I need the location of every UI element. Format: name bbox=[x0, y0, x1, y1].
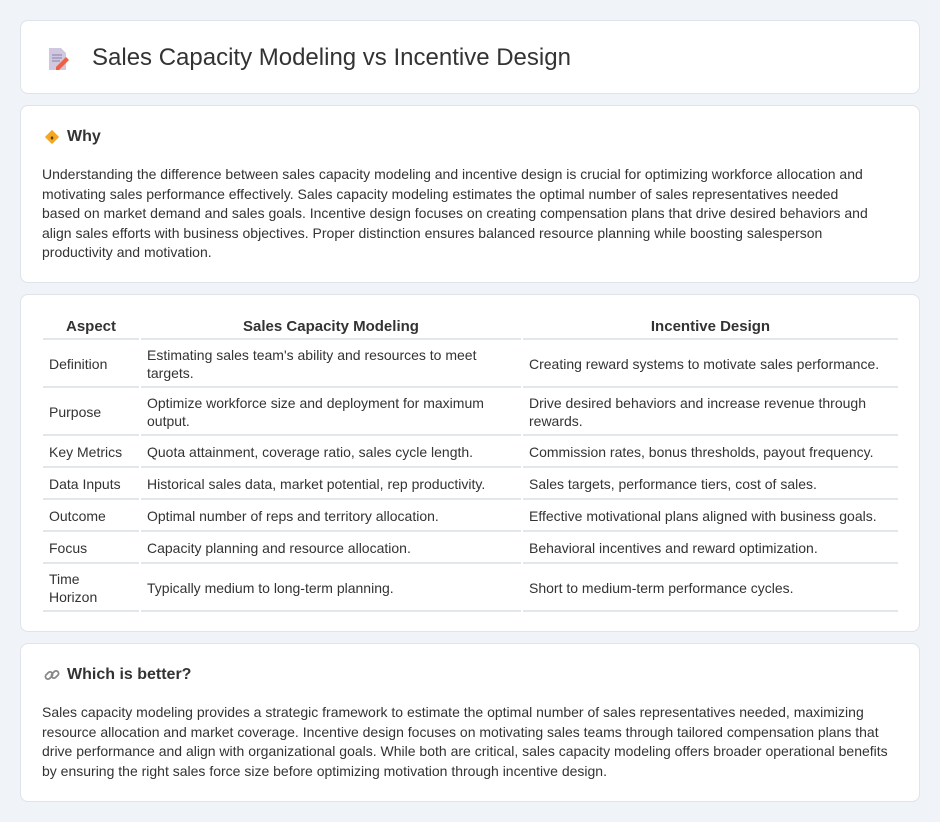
table: Commission rates, bonus thresholds, payout frequency. bbox=[529, 444, 873, 460]
table: Short to medium-term performance cycles. bbox=[529, 580, 794, 596]
icon: document with pencil bbox=[49, 48, 69, 70]
table: Aspect bbox=[66, 318, 116, 335]
table: Focus bbox=[49, 540, 87, 556]
heading: Why bbox=[67, 128, 101, 145]
table: Sales Capacity Modeling bbox=[243, 318, 419, 335]
panel: which is better bbox=[20, 643, 920, 802]
table: Time bbox=[49, 571, 80, 587]
table: Definition bbox=[49, 356, 107, 372]
table: Purpose bbox=[49, 404, 101, 420]
table: Data Inputs bbox=[49, 476, 121, 492]
table: Sales targets, performance tiers, cost of sales. bbox=[529, 476, 817, 492]
panel: why bbox=[20, 105, 920, 283]
icon: diamond: ♦ bbox=[50, 135, 54, 142]
text block: Sales capacity modeling provides a strategic framework to estimate the optimal number of sales representatives needed, maximizing resource allocation and market coverage. Incentive design focuses on motivating sales teams through tailored compensation plans that drive performance and align with organizational goals. While both are critical, sales capacity modeling offers broader operational benefits by ensuring the right sales force size before optimizing motivation through incentive design. bbox=[42, 704, 888, 779]
table: Optimize workforce size and deployment for maximum output. bbox=[147, 395, 484, 429]
panel: comparison table bbox=[20, 294, 920, 632]
table: Historical sales data, market potential, rep productivity. bbox=[147, 476, 485, 492]
table: Quota attainment, coverage ratio, sales cycle length. bbox=[147, 444, 473, 460]
table: Typically medium to long-term planning. bbox=[147, 580, 394, 596]
icon: link bbox=[44, 670, 60, 680]
table: Capacity planning and resource allocation. bbox=[147, 540, 411, 556]
table: Estimating sales team's ability and resources to meet targets. bbox=[147, 347, 476, 381]
heading: Which is better? bbox=[67, 666, 191, 683]
text block: Understanding the difference between sales capacity modeling and incentive design is crucial for optimizing workforce allocation and motivating sales performance effectively. Sales capacity modeling estimates the optimal number of sales representatives needed based on market demand and sales goals. Incentive design focuses on creating compensation plans that drive desired behaviors and align sales efforts with business objectives. Proper distinction ensures balanced resource planning while boosting salesperson productivity and motivation. bbox=[42, 166, 868, 260]
table: Key Metrics bbox=[49, 444, 122, 460]
table: Optimal number of reps and territory allocation. bbox=[147, 508, 439, 524]
title: Sales Capacity Modeling vs Incentive Design bbox=[92, 44, 571, 71]
table: Behavioral incentives and reward optimization. bbox=[529, 540, 818, 556]
table: Effective motivational plans aligned with business goals. bbox=[529, 508, 877, 524]
table: Incentive Design bbox=[651, 318, 770, 335]
table: Drive desired behaviors and increase revenue through rewards. bbox=[529, 395, 866, 429]
table bbox=[43, 318, 898, 612]
icon: diamond bbox=[45, 130, 59, 144]
table: Horizon bbox=[49, 589, 97, 605]
table: Outcome bbox=[49, 508, 106, 524]
header card bbox=[20, 20, 920, 94]
table: Creating reward systems to motivate sales performance. bbox=[529, 356, 879, 372]
